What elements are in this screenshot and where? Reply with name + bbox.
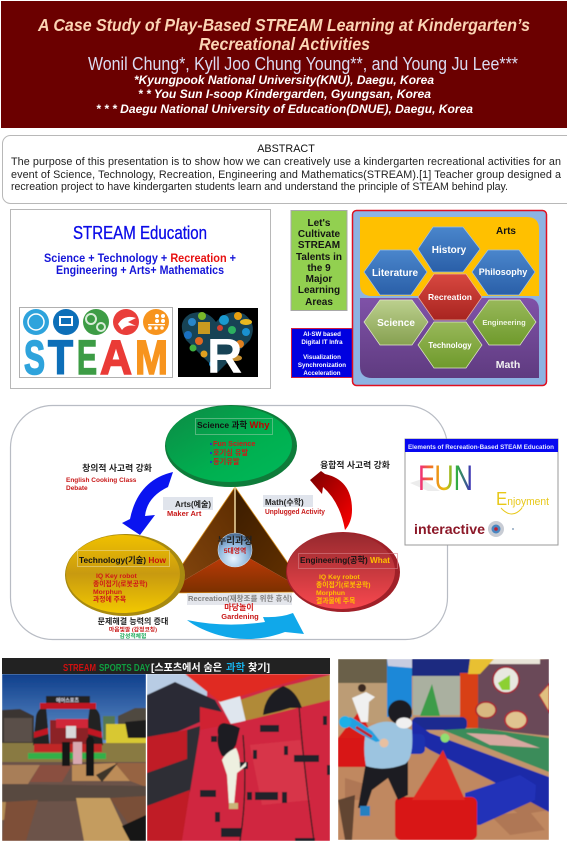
- panel: STREAM diagram: [10, 405, 448, 640]
- abstract body: event of Science, Technology, Recreation, Engineering and Mathematics(STREAM).[1] Teacher group designed a: [11, 169, 561, 181]
- R heart logo: R: [207, 330, 242, 384]
- title: [37, 15, 530, 54]
- label: recreation: Gardening: [221, 612, 259, 621]
- affiliations: * * * Daegu National University of Education(DNUE), Daegu, Korea: [96, 102, 473, 116]
- callout: cultivate talents: Major: [306, 274, 332, 285]
- STEAM logo: A: [100, 332, 132, 385]
- panel: nine learning areas: [352, 210, 546, 386]
- abstract body: The purpose of this presentation is to show how we can creatively use a kindergarten recreational activities for an: [11, 156, 561, 168]
- arrow: red: [310, 471, 352, 530]
- elements header: Elements of Recreation-Based STEAM Education: [408, 444, 554, 451]
- hexagon: science: Science: [377, 318, 415, 329]
- panel: abstract: [2, 136, 567, 204]
- label: arts: Arts(예술): [175, 499, 211, 509]
- hexagon: history: History: [432, 245, 467, 256]
- arrow: cyan: [187, 613, 304, 639]
- affiliations: * * You Sun I-soop Kindergarden, Gyungsan, Korea: [138, 87, 431, 101]
- ellipse: engineering: Engineering(공학) What: [300, 554, 390, 565]
- affiliations: [96, 73, 473, 116]
- ellipse: engineering: 결과물에 주목: [316, 596, 355, 605]
- callout: cultivate talents: STREAM: [298, 240, 340, 251]
- photo: child with inflatable bat: [338, 659, 549, 840]
- ellipse: technology: 과정에 주목: [93, 594, 126, 604]
- callout: digital infrastructure: [292, 328, 352, 378]
- label: problem solving: 마음빛깔 (감정코칭): [109, 626, 157, 634]
- label: problem solving: 감성적체험: [120, 632, 146, 640]
- STEAM logo: M: [135, 332, 168, 385]
- photo strip: sports day: [2, 658, 330, 841]
- ellipse: science: 호기심 유발: [213, 448, 248, 457]
- STREAM definition: Science + Technology + Recreation +: [44, 253, 236, 265]
- center sphere: 누리과정: [218, 535, 252, 547]
- arts region: [360, 217, 539, 296]
- R heart logo: [178, 308, 258, 384]
- hexagon: literature: [364, 250, 427, 295]
- STEAM logo: S: [24, 332, 45, 385]
- hexagon: philosophy: Philosophy: [479, 267, 527, 277]
- abstract body: [11, 156, 561, 193]
- label: math: [263, 495, 325, 516]
- label: arts: [163, 497, 213, 518]
- center sphere: 5대영역: [224, 546, 246, 555]
- affiliations: *Kyungpook National University(KNU), Daegu, Korea: [134, 73, 434, 87]
- callout: digital infrastructure: Synchronization: [298, 362, 346, 369]
- sports day caption: 과학: [226, 661, 245, 674]
- callout: digital infrastructure: AI-SW based: [303, 331, 341, 338]
- hexagon: engineering: Engineering: [482, 318, 526, 327]
- photo: climbing wall: [147, 674, 330, 841]
- callout: cultivate talents: Talents in: [296, 252, 342, 263]
- panel: STREAM education: [10, 210, 270, 388]
- math label: Math: [496, 359, 520, 371]
- math region: [360, 298, 539, 378]
- label: creative thinking: [66, 462, 152, 492]
- label: recreation: 마당놀이: [224, 602, 254, 612]
- word: fun: FUN: [418, 459, 473, 498]
- label: creative thinking: English Cooking Class: [66, 477, 137, 484]
- STEAM logo: E: [77, 332, 97, 385]
- label: recreation: Recreation(재창조를 위한 휴식): [188, 593, 292, 603]
- callout: digital infrastructure: Digital IT Infra: [301, 339, 343, 346]
- label: problem solving: 문제해결 능력의 증대: [98, 616, 168, 626]
- callout: cultivate talents: Learning: [298, 285, 340, 296]
- header banner: [1, 1, 567, 128]
- label: arts: Maker Art: [167, 509, 202, 518]
- word: interactive: interactive: [414, 521, 485, 537]
- callout: cultivate talents: [291, 210, 347, 310]
- center sphere: [218, 533, 252, 567]
- arrow: blue: [122, 472, 173, 535]
- label: recreation: [187, 593, 292, 621]
- STREAM heading: STREAM Education: [73, 223, 207, 243]
- ellipse: technology: IQ Key robot: [96, 573, 138, 580]
- word: enjoyment: Enjoyment: [496, 489, 549, 509]
- label: problem solving: [98, 616, 168, 640]
- ellipse: science: 동기유발: [213, 457, 240, 466]
- sports day caption: [스포츠에서 숨은: [151, 661, 222, 674]
- STEAM logo: [20, 308, 172, 385]
- sports day caption: STREAM: [63, 662, 96, 674]
- ellipse: engineering: Morphun: [316, 590, 345, 597]
- sports day caption: 찾기]: [248, 661, 270, 674]
- abstract body: recreation project to have kindergarten students learn and understand the principle of STEAM behind play.: [11, 181, 508, 193]
- ellipse: technology: 종이접기(로봇공학): [93, 579, 148, 588]
- label: creative thinking: 창의적 사고력 강화: [82, 462, 152, 473]
- hexagon: recreation: Recreation: [428, 292, 472, 302]
- hexagon: history: [418, 227, 480, 272]
- abstract heading: ABSTRACT: [257, 143, 315, 155]
- callout: cultivate talents: Areas: [305, 297, 333, 308]
- STREAM definition: Engineering + Arts+ Mathematics: [56, 265, 224, 277]
- hexagon: science: [364, 300, 428, 345]
- ellipse: engineering: IQ Key robot: [319, 574, 361, 581]
- hexagon: engineering: [473, 300, 536, 345]
- title: Recreational Activities: [199, 34, 370, 54]
- panel: elements of recreation: [405, 439, 558, 545]
- label: math: Math(수학): [265, 497, 304, 507]
- callout: digital infrastructure: Acceleration: [303, 370, 341, 377]
- triangle: [163, 487, 308, 593]
- photo: inflatable obstacle course: 에어스포츠: [56, 697, 79, 704]
- ellipse: engineering: 종이접기(로봇공학): [316, 580, 371, 589]
- hexagon: recreation: [418, 274, 482, 320]
- callout: cultivate talents: the 9: [307, 263, 331, 274]
- label: convergent thinking: 융합적 사고력 강화: [320, 459, 390, 470]
- STREAM definition: [44, 253, 236, 277]
- label: math: Unplugged Activity: [265, 509, 325, 516]
- hexagon: technology: Technology: [428, 341, 472, 350]
- title: A Case Study of Play-Based STREAM Learning at Kindergarten’s: [37, 15, 530, 35]
- ellipse: technology: Morphun: [93, 589, 122, 596]
- ellipse: science: Science 과학 Why: [197, 420, 270, 431]
- photo: inflatable obstacle course: [2, 674, 146, 841]
- sports day caption: SPORTS DAY: [99, 662, 150, 674]
- ellipse: engineering: [286, 532, 400, 612]
- hexagon: literature: Literature: [372, 268, 418, 279]
- hexagon: technology: [418, 322, 482, 368]
- sports day caption: [2, 658, 330, 674]
- ellipse: science: [165, 405, 297, 487]
- ellipse: technology: Technology(기술) How: [79, 554, 166, 565]
- callout: cultivate talents: Cultivate: [298, 229, 341, 240]
- STEAM logo: T: [48, 332, 73, 385]
- ellipse: technology: [65, 534, 185, 616]
- label: creative thinking: Debate: [66, 485, 88, 492]
- hexagon: philosophy: [472, 250, 535, 295]
- ellipse: science: Fun Science: [213, 439, 255, 448]
- word: fun: [410, 459, 473, 498]
- callout: digital infrastructure: Visualization: [303, 354, 341, 361]
- elements header: [405, 439, 558, 452]
- arts label: Arts: [496, 226, 516, 237]
- callout: cultivate talents: Let's: [308, 218, 331, 229]
